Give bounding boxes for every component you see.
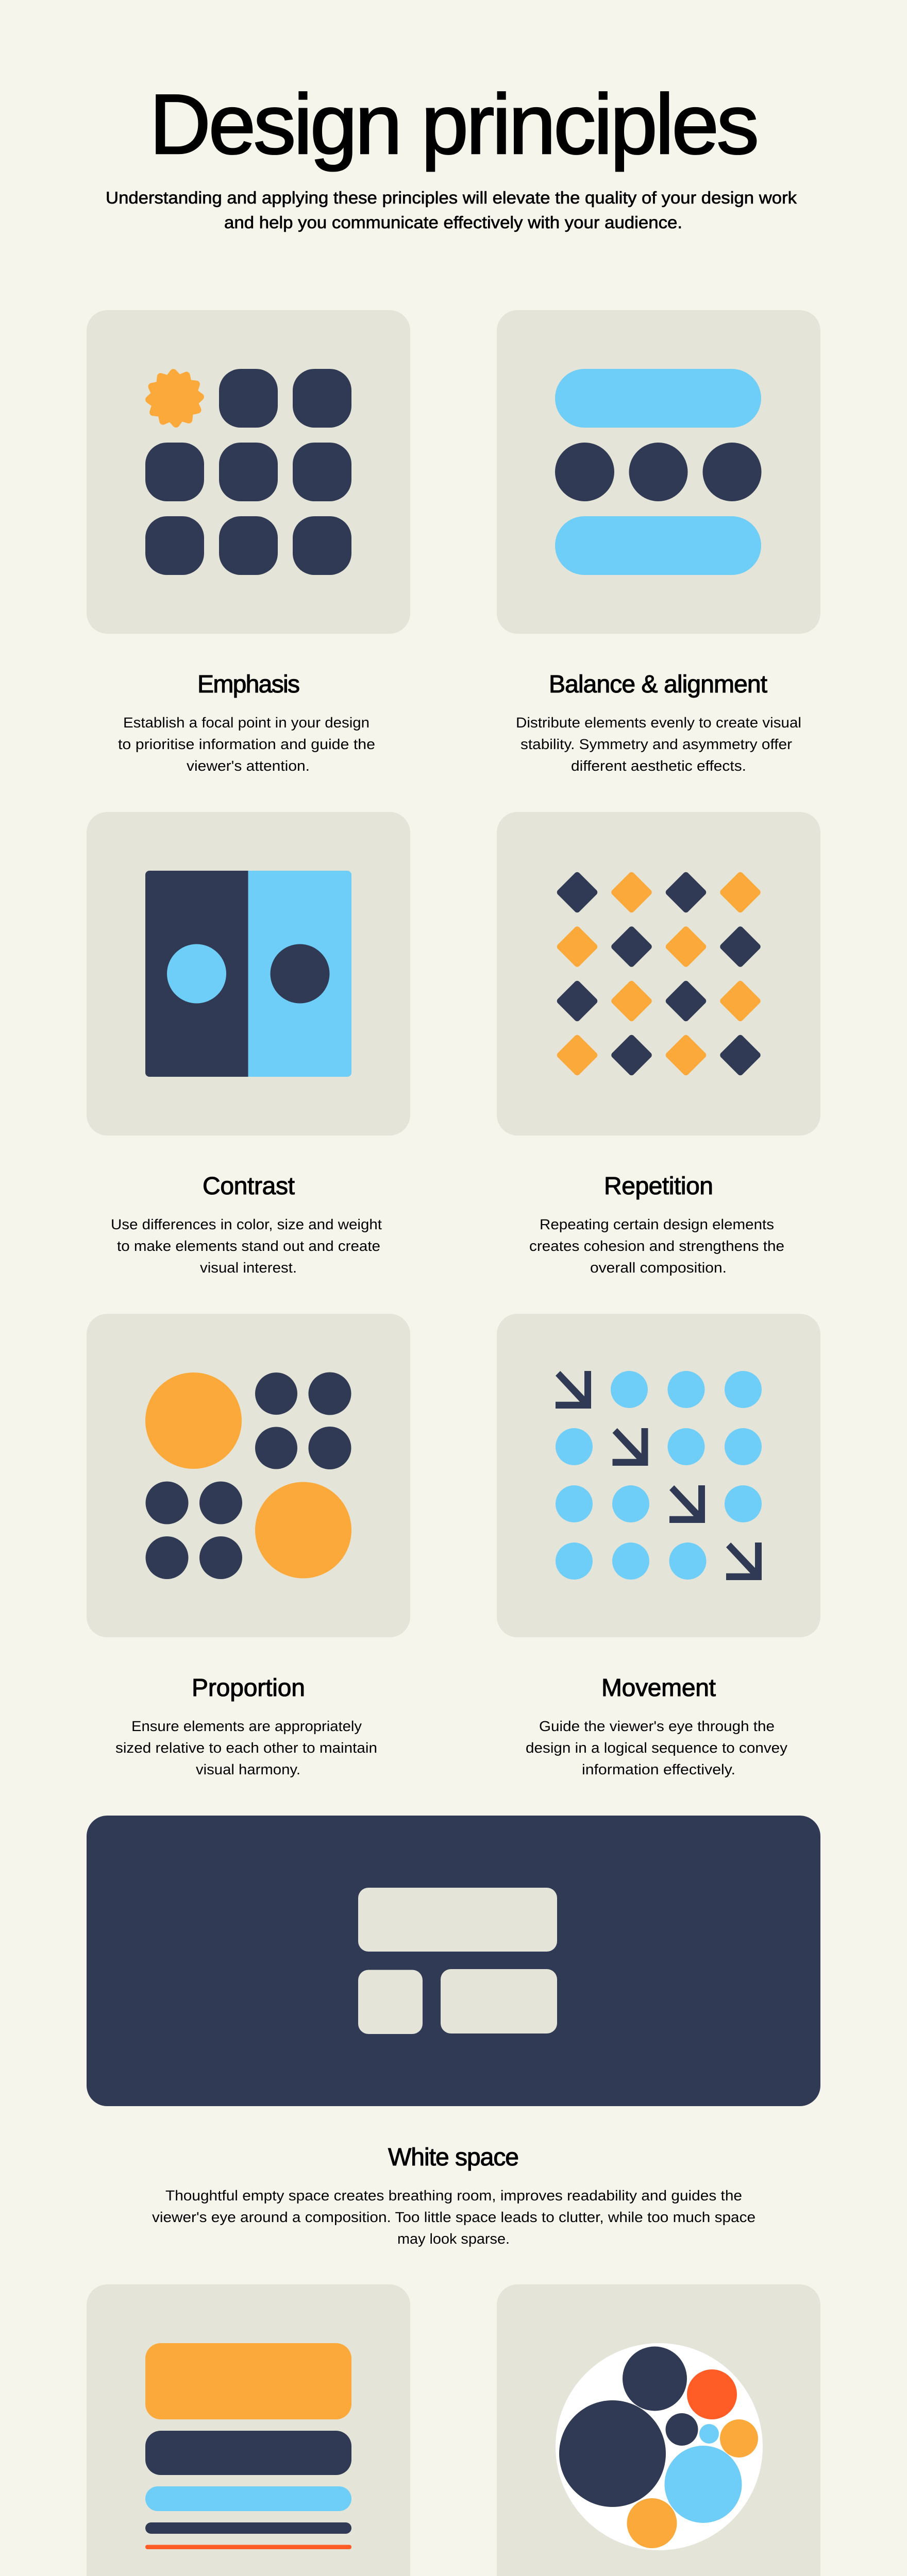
arrow — [669, 1485, 705, 1523]
panel: Movement — [497, 1314, 820, 1777]
description — [111, 1216, 382, 1276]
icon: tile grid with starburst focal point — [145, 369, 351, 575]
icon: stacked bars — [145, 2343, 351, 2549]
description: Repeating certain design elements — [540, 1216, 774, 1232]
description: design in a logical sequence to convey — [526, 1740, 787, 1756]
arrow — [556, 1371, 591, 1409]
arrow — [612, 1428, 648, 1466]
description: viewer's attention. — [187, 758, 310, 774]
description: Distribute elements evenly to create visual — [516, 715, 801, 731]
description: creates cohesion and strengthens the — [529, 1238, 784, 1254]
description: Ensure elements are appropriately — [131, 1718, 362, 1734]
card background — [87, 1816, 820, 2106]
card background — [497, 310, 820, 634]
icon: diamond pattern — [556, 871, 762, 1077]
icon: circles framed in a white circle — [556, 2343, 763, 2550]
icon: orange starburst — [149, 372, 200, 424]
description: to prioritise information and guide the — [118, 736, 375, 752]
heading: Movement — [601, 1674, 716, 1702]
intro text — [106, 188, 797, 232]
description: visual interest. — [200, 1260, 297, 1276]
card background — [87, 1314, 410, 1637]
description: stability. Symmetry and asymmetry offer — [520, 736, 792, 752]
panel: Balance & alignment — [497, 310, 820, 774]
icon: large and small circles — [145, 1372, 351, 1579]
description: may look sparse. — [397, 2231, 510, 2247]
description: overall composition. — [590, 1260, 727, 1276]
description — [516, 715, 801, 774]
panel: Hierarchy — [87, 2284, 410, 2576]
heading: White space — [388, 2144, 519, 2171]
arrow — [726, 1543, 762, 1580]
description: Guide the viewer's eye through the — [539, 1718, 775, 1734]
card background — [87, 2284, 410, 2576]
description: visual harmony. — [196, 1761, 300, 1777]
description: Thoughtful empty space creates breathing room, improves readability and guides the — [165, 2188, 742, 2204]
intro text: Understanding and applying these principles will elevate the quality of your design work — [106, 188, 797, 207]
heading: Emphasis — [197, 671, 300, 698]
description: different aesthetic effects. — [571, 758, 746, 774]
description — [115, 1718, 377, 1777]
intro text: and help you communicate effectively with your audience. — [224, 213, 682, 232]
card background — [497, 812, 820, 1136]
heading: Balance & alignment — [549, 671, 767, 698]
icon: three blocks — [358, 1888, 557, 2034]
description — [529, 1216, 784, 1276]
description — [118, 715, 375, 774]
description — [526, 1718, 787, 1777]
panel: Contrast — [87, 812, 410, 1276]
card background — [87, 310, 410, 634]
panel: Proportion — [87, 1314, 410, 1777]
description: information effectively. — [582, 1761, 735, 1777]
panel: Repetition — [497, 812, 820, 1276]
heading: Proportion — [192, 1674, 305, 1702]
description: sized relative to each other to maintain — [115, 1740, 377, 1756]
panel: Emphasis — [87, 310, 410, 774]
panel: White space — [87, 1816, 820, 2247]
description: Use differences in color, size and weight — [111, 1216, 382, 1232]
description: to make elements stand out and create — [117, 1238, 380, 1254]
card background — [497, 2284, 820, 2576]
card background — [87, 812, 410, 1136]
panel: Framing — [497, 2284, 820, 2576]
heading: Contrast — [203, 1173, 295, 1200]
icon: split rectangle with circles — [145, 871, 351, 1077]
title: Design principles — [149, 77, 759, 172]
card background — [497, 1314, 820, 1637]
heading: Repetition — [604, 1173, 713, 1200]
icon: pills and circles — [555, 369, 762, 575]
description — [152, 2188, 755, 2247]
description: viewer's eye around a composition. Too little space leads to clutter, while too much space — [152, 2209, 755, 2225]
icon: dots and diagonal arrows — [556, 1371, 762, 1580]
description: Establish a focal point in your design — [123, 715, 369, 731]
